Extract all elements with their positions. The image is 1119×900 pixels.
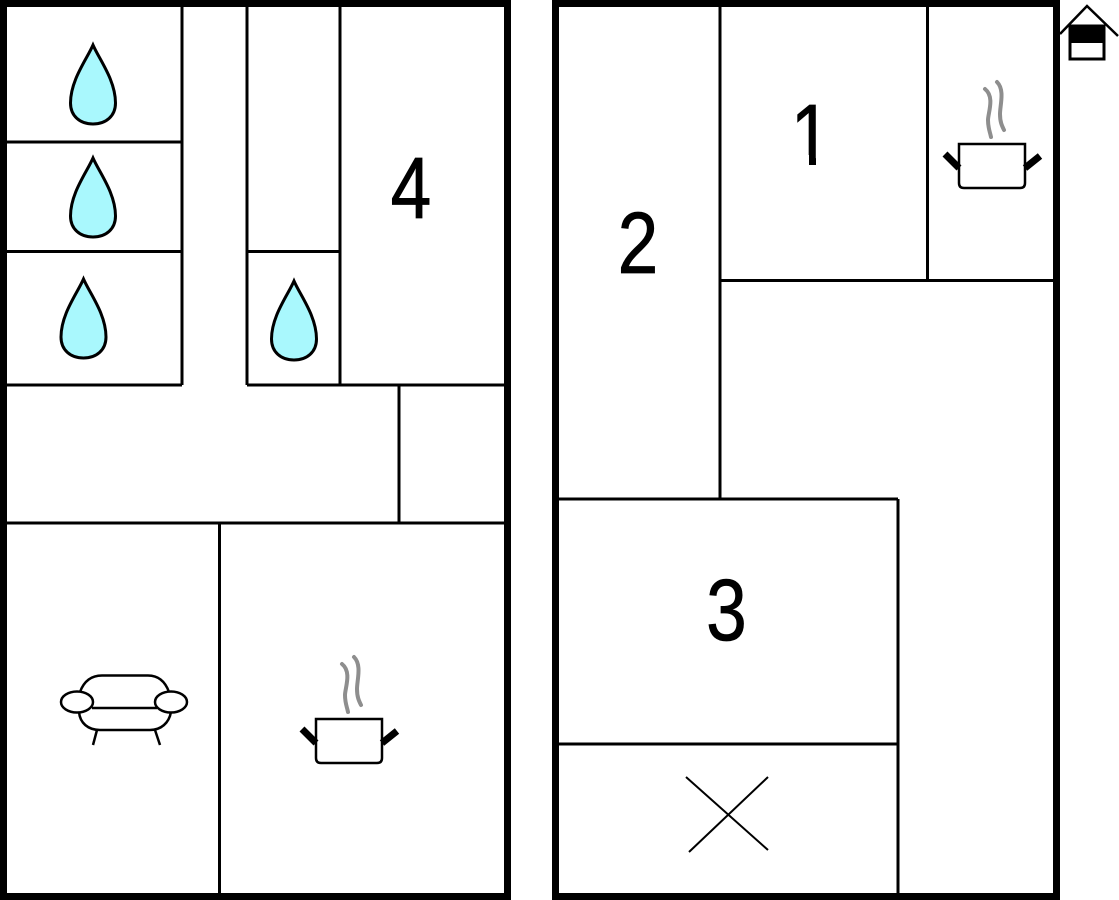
bedroom number 3: 3 xyxy=(706,562,747,659)
bedroom number 1: 1 xyxy=(791,87,831,184)
icon: cooking pot, ground floor xyxy=(302,657,397,763)
icon: cross, no access xyxy=(686,777,768,852)
icon: water drop bathroom 2 xyxy=(70,158,116,237)
bedroom number 2: 2 xyxy=(618,195,658,292)
interior walls: ground floor xyxy=(7,7,504,893)
icon: water drop bathroom 4 xyxy=(272,281,316,360)
bedroom number 4: 4 xyxy=(391,140,431,237)
icon: sofa xyxy=(61,676,187,745)
icon: house floor indicator xyxy=(1060,6,1118,59)
interior walls: upper floor xyxy=(559,7,1053,893)
outer wall: upper floor xyxy=(556,4,1056,896)
panel: upper floor plan xyxy=(556,4,1056,896)
icon: water drop bathroom 1 xyxy=(70,45,116,124)
panel: ground floor plan xyxy=(4,4,508,896)
outer wall: ground floor xyxy=(4,4,508,896)
icon: cooking pot, upper floor xyxy=(945,82,1040,188)
icon: water drop bathroom 3 xyxy=(61,279,106,358)
